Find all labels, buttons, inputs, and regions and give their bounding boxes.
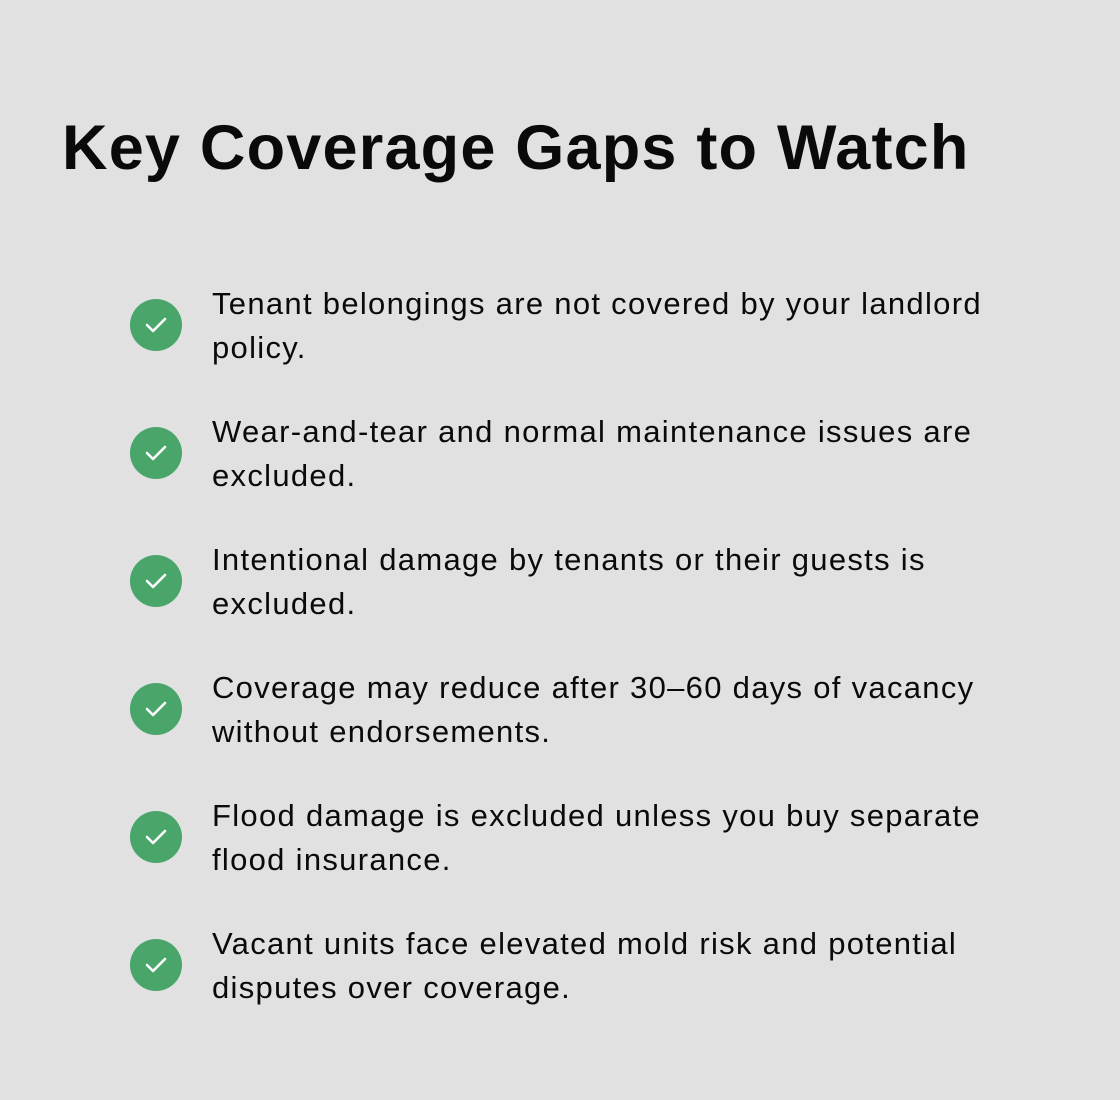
text: disputes over coverage. xyxy=(212,970,571,1005)
text xyxy=(212,414,972,493)
item 1 xyxy=(130,286,982,365)
text: Coverage may reduce after 30–60 days of vacancy xyxy=(212,670,974,705)
text: excluded. xyxy=(212,586,356,621)
item 6 xyxy=(130,926,957,1005)
text: Intentional damage by tenants or their guests is xyxy=(212,542,926,577)
text: Wear-and-tear and normal maintenance issues are xyxy=(212,414,972,449)
icon: check xyxy=(130,427,182,479)
text: Flood damage is excluded unless you buy separate xyxy=(212,798,981,833)
item 3 xyxy=(130,542,926,621)
text: without endorsements. xyxy=(212,714,551,749)
icon: check xyxy=(130,555,182,607)
icon: check xyxy=(130,811,182,863)
item 5 xyxy=(130,798,981,877)
item 4 xyxy=(130,670,974,749)
item 2 xyxy=(130,414,972,493)
text xyxy=(212,670,974,749)
text xyxy=(212,798,981,877)
text: Tenant belongings are not covered by your landlord xyxy=(212,286,982,321)
text xyxy=(212,286,982,365)
text: flood insurance. xyxy=(212,842,452,877)
icon: check xyxy=(130,939,182,991)
title: Key Coverage Gaps to Watch xyxy=(62,113,970,183)
icon: check xyxy=(130,683,182,735)
text: policy. xyxy=(212,330,307,365)
text: Vacant units face elevated mold risk and potential xyxy=(212,926,957,961)
text: excluded. xyxy=(212,458,356,493)
icon: check xyxy=(130,299,182,351)
text xyxy=(212,926,957,1005)
text xyxy=(212,542,926,621)
